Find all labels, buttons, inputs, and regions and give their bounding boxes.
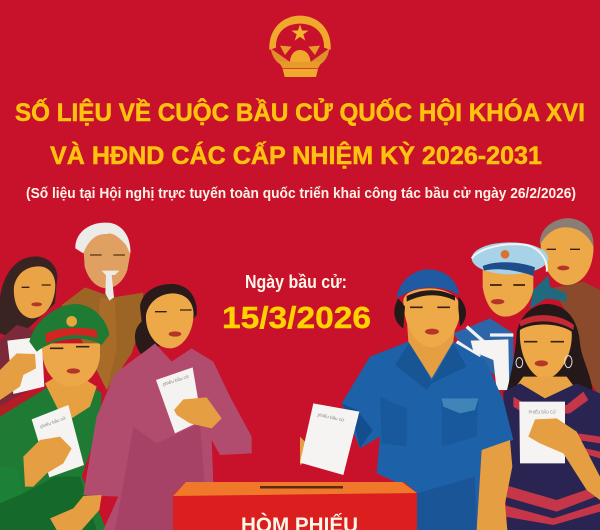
ballot [32,405,84,477]
hand [300,437,310,465]
figure: woman with red headband [503,304,600,530]
figure: woman in pink ao dai: phiếu bầu cử [162,373,190,387]
figure: woman with red headband: PHIẾU BẦU CỬ [529,408,556,414]
forearm [477,440,512,530]
figure: woman with dark hair [0,257,57,417]
ballot box [173,482,417,530]
ballot [156,367,202,433]
icon: national emblem [269,16,331,77]
illustration: voters on the right [300,218,600,530]
figure: man in blue work uniform [300,269,513,530]
figure: soldier in green [0,304,109,530]
figure: bald elder in brown [540,218,600,397]
ballot [300,403,359,475]
figure: navy sailor [453,242,567,393]
election date: 15/3/2026 [222,301,371,335]
election date label: Ngày bầu cử: [245,271,347,292]
illustration: voters on the left [0,223,252,530]
title line 1: SỐ LIỆU VỀ CUỘC BẦU CỬ QUỐC HỘI KHÓA XVI [15,97,585,127]
figure: man in blue work uniform: phiếu bầu cử [317,411,345,423]
figure: soldier in green: phiếu bầu cử [39,414,67,429]
ballot [519,402,565,463]
ballot [471,339,509,390]
title line 2: VÀ HĐND CÁC CẤP NHIỆM KỲ 2026-2031 [50,140,542,170]
figure: woman in pink ao dai [50,284,252,530]
ballot [7,337,44,394]
figure: elderly man [62,223,143,390]
